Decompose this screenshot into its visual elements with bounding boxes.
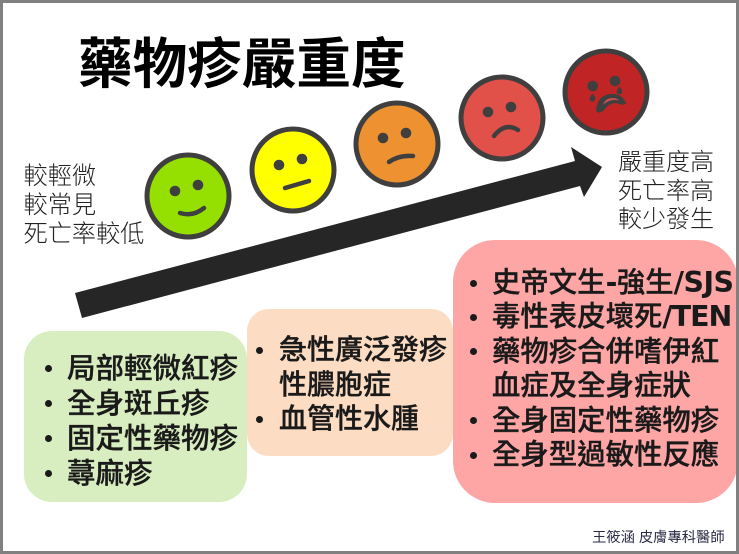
panel: severe reactions <box>453 240 738 503</box>
mild reaction list: 固定性藥物疹 <box>67 422 238 454</box>
title: 藥物疹嚴重度 <box>78 34 406 95</box>
mild reaction list <box>45 352 238 490</box>
panel: mild reactions <box>24 331 247 502</box>
severe reaction list: 全身固定性藥物疹 <box>492 404 719 437</box>
right severity description: 死亡率高 <box>618 178 714 204</box>
left severity description: 死亡率較低 <box>24 221 144 248</box>
icon: dark red crying face <box>565 51 647 133</box>
author credit: 王筱涵 皮膚專科醫師 <box>592 530 725 546</box>
right severity description: 嚴重度高 <box>618 149 714 176</box>
right severity description <box>618 149 714 233</box>
icon: orange frowning face <box>356 103 438 185</box>
moderate reaction list: 血管性水腫 <box>279 402 419 435</box>
moderate reaction list: 性膿胞症 <box>279 368 391 400</box>
left severity description <box>24 163 144 248</box>
left severity description: 較輕微 <box>24 163 96 190</box>
severe reaction list <box>470 266 734 471</box>
moderate reaction list: 急性廣泛發疹 <box>279 333 447 366</box>
severe reaction list: 毒性表皮壞死/TEN <box>492 300 731 333</box>
mild reaction list: 全身斑丘疹 <box>67 386 210 420</box>
severe reaction list: 史帝文生-強生/SJS <box>492 266 734 299</box>
mild reaction list: 局部輕微紅疹 <box>67 352 238 384</box>
icon: red sad face <box>461 77 543 159</box>
right severity description: 較少發生 <box>618 206 714 233</box>
icon: green smiling face <box>147 155 229 237</box>
panel: moderate reactions <box>247 309 453 456</box>
severe reaction list: 血症及全身症狀 <box>492 369 691 402</box>
mild reaction list: 蕁麻疹 <box>67 456 153 490</box>
severe reaction list: 藥物疹合併嗜伊紅 <box>492 335 719 368</box>
severe reaction list: 全身型過敏性反應 <box>492 438 719 471</box>
left severity description: 較常見 <box>24 192 96 219</box>
moderate reaction list <box>256 333 447 435</box>
icon: yellow neutral face <box>252 129 334 211</box>
arrow: increasing severity <box>75 147 602 318</box>
